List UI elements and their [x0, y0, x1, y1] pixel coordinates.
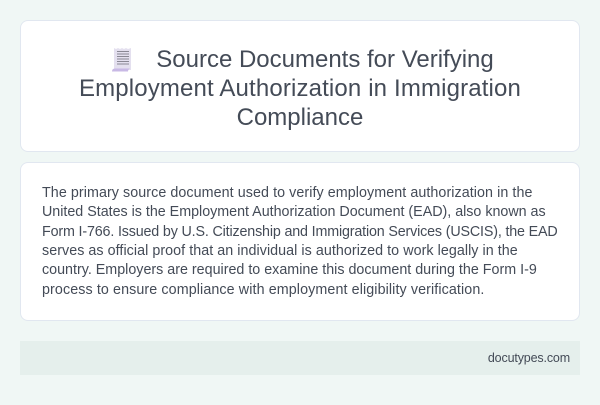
panel: description card: United States is the Employment Authorization Document (EAD), also known as: [42, 204, 546, 220]
panel: description card: process to ensure compliance with employment eligibility verification.: [42, 282, 484, 298]
panel: description card: Form I-766. Issued by U.S. Citizenship and Immigration Services (USCIS), the EAD: [42, 224, 558, 240]
panel: description card: The primary source document used to verify employment authorization in the: [42, 185, 532, 201]
panel: description card: serves as official proof that an individual is authorized to work legally in the: [42, 243, 518, 259]
heading: [79, 46, 521, 131]
icon: document scroll: [112, 48, 131, 72]
footer bar: [20, 341, 580, 375]
footer text: docutypes.com: [488, 351, 570, 365]
panel: title card: Source Documents for Verifying: [156, 46, 494, 73]
panel: title card: [20, 20, 580, 152]
panel: description card: country. Employers are required to examine this document during the Form I-9: [42, 262, 537, 278]
text block: description: [42, 185, 558, 298]
panel: description card: [20, 162, 580, 321]
panel: title card: Compliance: [237, 104, 363, 131]
panel: title card: Employment Authorization in Immigration: [79, 75, 521, 102]
